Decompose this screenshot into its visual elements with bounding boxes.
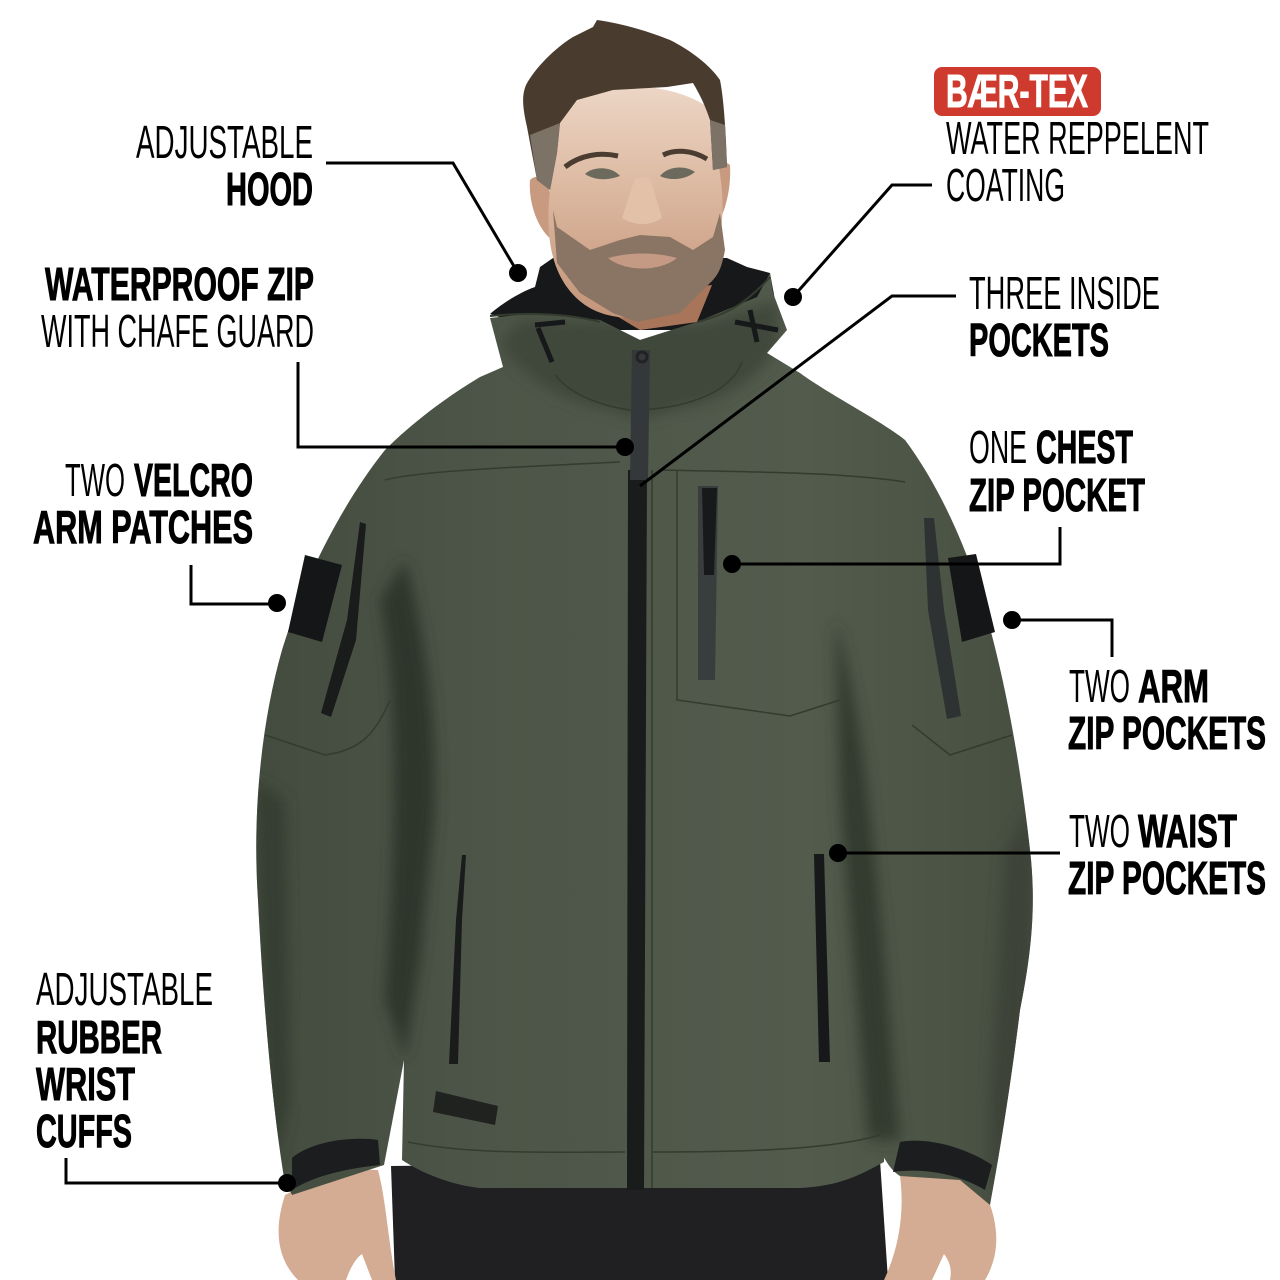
right hand bbox=[884, 1172, 996, 1280]
callout: waist zip pockets: WAIST bbox=[1138, 805, 1237, 857]
neck bbox=[590, 285, 712, 330]
right waist zip bbox=[814, 854, 830, 1062]
callout: arm zip pockets: ARM bbox=[1138, 660, 1209, 712]
callout: chest zip pocket bbox=[723, 421, 1145, 573]
hood lining bbox=[490, 258, 775, 330]
fold shading bbox=[380, 560, 435, 1060]
callout: velcro arm patches: ARM PATCHES bbox=[33, 501, 253, 553]
chest zip bbox=[698, 486, 718, 680]
hair bbox=[523, 20, 727, 190]
nose bbox=[622, 178, 662, 224]
right ear bbox=[704, 163, 730, 240]
callout: arm zip pockets bbox=[1003, 611, 1266, 759]
callout: water repellent coating: COATING bbox=[946, 159, 1065, 211]
hood edge fold bbox=[490, 277, 770, 322]
main zip bbox=[627, 470, 647, 1190]
right cuff strap bbox=[893, 1141, 992, 1190]
left arm zip bbox=[321, 522, 366, 717]
beard bbox=[553, 210, 725, 322]
callout: adjustable hood: ADJUSTABLE bbox=[136, 116, 313, 168]
left waist zip bbox=[449, 855, 466, 1064]
callout: chest zip pocket: CHEST bbox=[1036, 421, 1133, 473]
badge: BÆR-TEX: BÆR-TEX bbox=[946, 65, 1088, 117]
gap between right fingers bbox=[932, 1254, 951, 1280]
callout: waist zip pockets: TWO bbox=[1069, 805, 1130, 857]
callout: rubber wrist cuffs: RUBBER bbox=[36, 1011, 162, 1063]
callout: three inside pockets bbox=[640, 267, 1160, 486]
left cuff strap bbox=[292, 1139, 380, 1190]
trousers bbox=[391, 1160, 888, 1280]
brand patch bbox=[433, 1091, 498, 1125]
callout: adjustable hood bbox=[136, 116, 527, 282]
callout: velcro arm patches: TWO bbox=[65, 454, 125, 506]
callout: water repellent coating bbox=[784, 65, 1209, 306]
callout: three inside pockets: POCKETS bbox=[969, 314, 1109, 366]
callout: rubber wrist cuffs bbox=[36, 963, 296, 1192]
hair grey sides bbox=[530, 120, 727, 190]
gap between left fingers bbox=[346, 1254, 372, 1280]
hood cords bbox=[535, 310, 778, 362]
seams bbox=[265, 362, 1012, 1188]
callout: rubber wrist cuffs: CUFFS bbox=[36, 1105, 132, 1157]
model wearing jacket bbox=[240, 20, 1050, 1280]
face bbox=[548, 87, 723, 318]
callout: rubber wrist cuffs: ADJUSTABLE bbox=[36, 963, 213, 1015]
callout: velcro arm patches: VELCRO bbox=[134, 454, 253, 506]
velcro patch left bbox=[288, 555, 342, 642]
callout: adjustable hood: HOOD bbox=[226, 163, 313, 215]
badge: BÆR-TEX bbox=[934, 65, 1101, 117]
callout: arm zip pockets: TWO bbox=[1069, 660, 1130, 712]
callout: chest zip pocket: ZIP POCKET bbox=[969, 469, 1145, 521]
eyes bbox=[585, 167, 695, 179]
left hand bbox=[279, 1170, 396, 1280]
callout: velcro arm patches bbox=[33, 454, 286, 612]
callout: waterproof zip bbox=[41, 258, 634, 456]
velcro patch right bbox=[948, 554, 995, 642]
right arm zip bbox=[924, 518, 961, 719]
eyebrows bbox=[565, 151, 707, 167]
callout: waterproof zip: WITH CHAFE GUARD bbox=[41, 305, 314, 357]
jacket body and sleeves bbox=[240, 260, 1050, 1220]
mouth bbox=[608, 254, 677, 268]
callout: rubber wrist cuffs: WRIST bbox=[36, 1058, 135, 1110]
callout: chest zip pocket: ONE bbox=[969, 421, 1027, 473]
callout: waist zip pockets bbox=[829, 805, 1266, 904]
left ear bbox=[530, 177, 556, 242]
callout: waterproof zip: WATERPROOF ZIP bbox=[45, 258, 314, 310]
